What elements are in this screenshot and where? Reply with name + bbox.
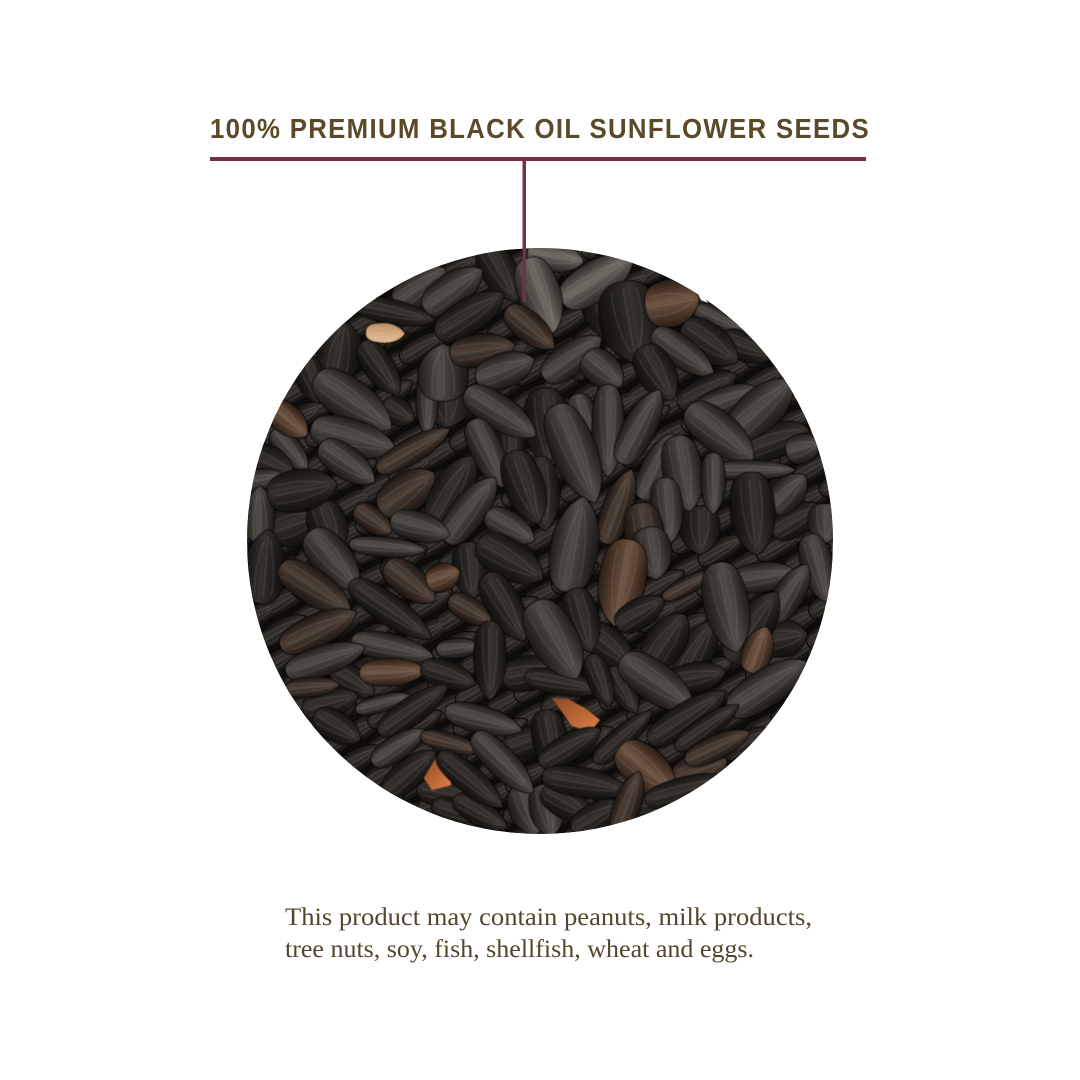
seed photo circle [235, 235, 843, 844]
horizontal rule [210, 157, 866, 161]
allergen note: tree nuts, soy, fish, shellfish, wheat and eggs. [285, 936, 754, 963]
allergen note: This product may contain peanuts, milk products, [285, 904, 812, 931]
white nick at circle edge [698, 294, 708, 303]
title: 100% PREMIUM BLACK OIL SUNFLOWER SEEDS [210, 113, 870, 144]
vertical connector line [522, 160, 526, 302]
allergen note [285, 904, 812, 963]
